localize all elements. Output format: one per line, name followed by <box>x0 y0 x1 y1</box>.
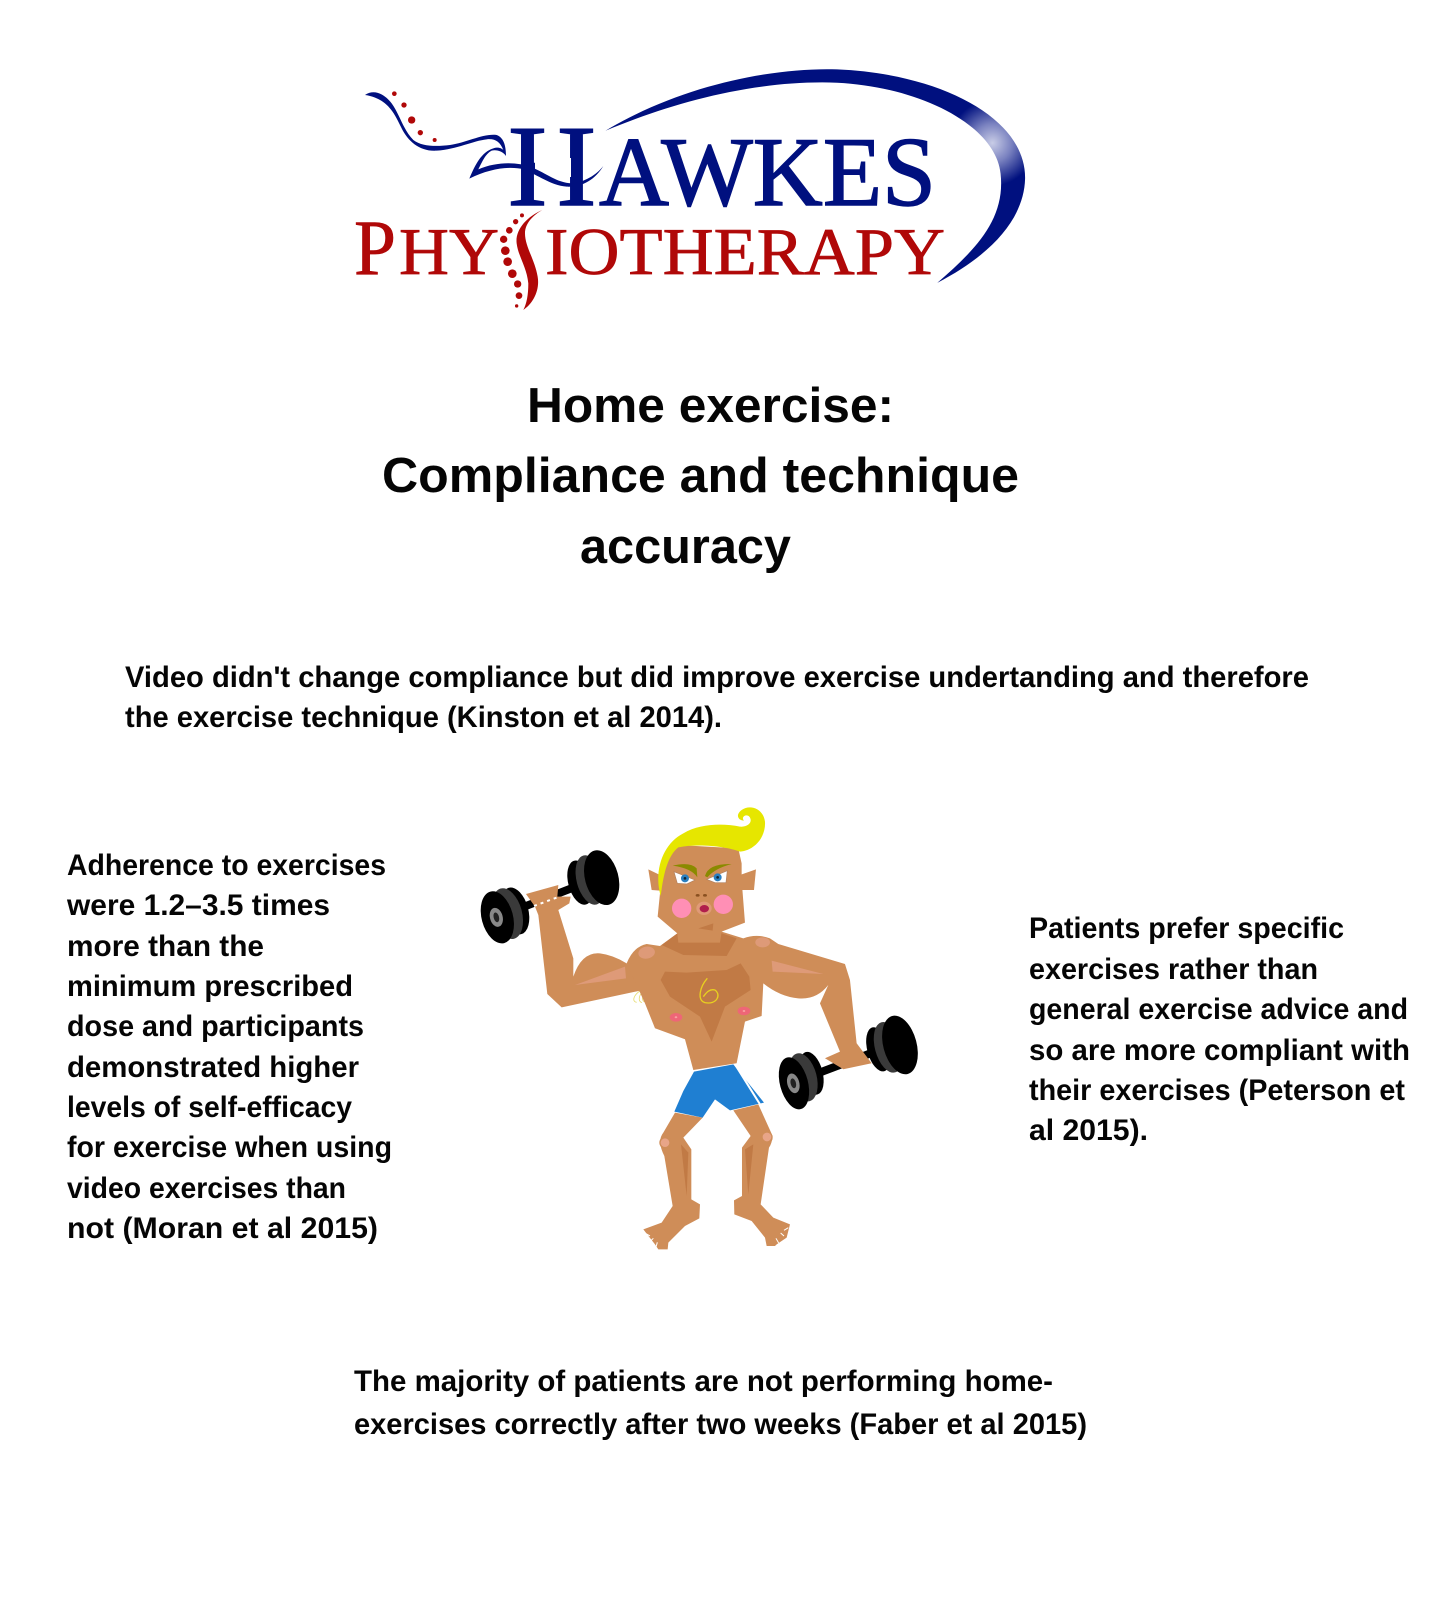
nipples <box>670 1007 750 1022</box>
eyebrows <box>673 864 732 877</box>
eyes <box>674 871 727 884</box>
fingers <box>534 897 557 906</box>
knees <box>659 1131 773 1149</box>
logo dots and spine <box>392 91 542 310</box>
illustration: muscular man lifting dumbbells <box>475 807 924 1249</box>
text block: adherence finding <box>66 849 392 1245</box>
text block: specific exercises finding: exercises rather than <box>1029 953 1318 986</box>
text block: adherence finding: video exercises than <box>67 1172 346 1205</box>
cheeks <box>672 895 733 918</box>
text block: adherence finding: not (Moran et al 2015) <box>67 1212 378 1245</box>
text block: video finding: the exercise technique (Kinston et al 2014). <box>125 701 722 734</box>
text block: adherence finding: for exercise when using <box>67 1131 392 1164</box>
left arm <box>526 885 643 1007</box>
hair <box>658 807 765 896</box>
shorts <box>674 1064 764 1118</box>
mouth <box>696 902 712 915</box>
logo word: Hawkes: H <box>508 103 596 231</box>
logo word: Hawkes <box>508 103 936 231</box>
text block: specific exercises finding <box>1029 912 1410 1147</box>
text block: video finding: Video didn't change compliance but did improve exercise undertanding and therefore <box>125 661 1309 694</box>
text block: specific exercises finding: general exercise advice and <box>1029 993 1408 1026</box>
logo bird ribbon <box>365 92 603 187</box>
text block: adherence finding: minimum prescribed <box>67 970 353 1003</box>
text block: video finding <box>125 661 1309 734</box>
chest hair curl <box>700 978 718 1003</box>
title: accuracy <box>580 520 791 574</box>
chin shading <box>698 923 713 931</box>
title: Compliance and technique <box>382 449 1019 503</box>
toes <box>646 1228 788 1247</box>
logo word: Physiotherapy: IOTHERAPY <box>545 215 945 289</box>
logo word: Physiotherapy: P <box>354 204 396 291</box>
armpit hair <box>634 973 770 1003</box>
text block: adherence finding: dose and participants <box>67 1010 364 1043</box>
text block: adherence finding: demonstrated higher <box>67 1051 360 1084</box>
text block: adherence finding: levels of self-efficacy <box>67 1091 353 1124</box>
text block: adherence finding: Adherence to exercises <box>67 849 386 882</box>
text block: technique after two weeks finding: exercises correctly after two weeks (Faber et al 2015) <box>354 1408 1087 1441</box>
logo swoosh arc <box>605 69 1025 283</box>
text block: specific exercises finding: so are more compliant with <box>1029 1034 1410 1067</box>
ears <box>648 869 756 891</box>
logo: Hawkes Physiotherapy <box>354 69 1025 310</box>
text block: technique after two weeks finding <box>354 1365 1087 1441</box>
icon: left dumbbell <box>475 846 625 947</box>
torso and right arm <box>627 932 872 1070</box>
logo word: Physiotherapy: HY <box>399 215 499 289</box>
gap in the H crossbar <box>535 158 571 177</box>
neck shading <box>662 933 737 956</box>
head <box>658 845 745 943</box>
nostrils <box>696 894 707 897</box>
right leg <box>733 1104 790 1246</box>
title: Home exercise: <box>527 379 894 433</box>
text block: technique after two weeks finding: The majority of patients are not performing home- <box>354 1365 1053 1398</box>
text block: specific exercises finding: al 2015). <box>1029 1114 1148 1147</box>
text block: specific exercises finding: their exercises (Peterson et <box>1029 1074 1405 1107</box>
left leg <box>643 1113 703 1249</box>
text block: adherence finding: more than the <box>67 930 264 963</box>
lower body <box>643 1064 790 1249</box>
icon: right dumbbell <box>774 1012 924 1113</box>
text block: specific exercises finding: Patients prefer specific <box>1029 912 1344 945</box>
title <box>382 379 1019 574</box>
muscle highlights <box>575 937 823 985</box>
text block: adherence finding: were 1.2–3.5 times <box>66 889 330 922</box>
logo word: Physiotherapy <box>354 204 945 291</box>
knee highlights and shin shading <box>661 1133 771 1196</box>
logo word: Hawkes: AWKES <box>599 118 936 227</box>
upper body <box>475 807 924 1113</box>
chest shading <box>661 963 751 1042</box>
